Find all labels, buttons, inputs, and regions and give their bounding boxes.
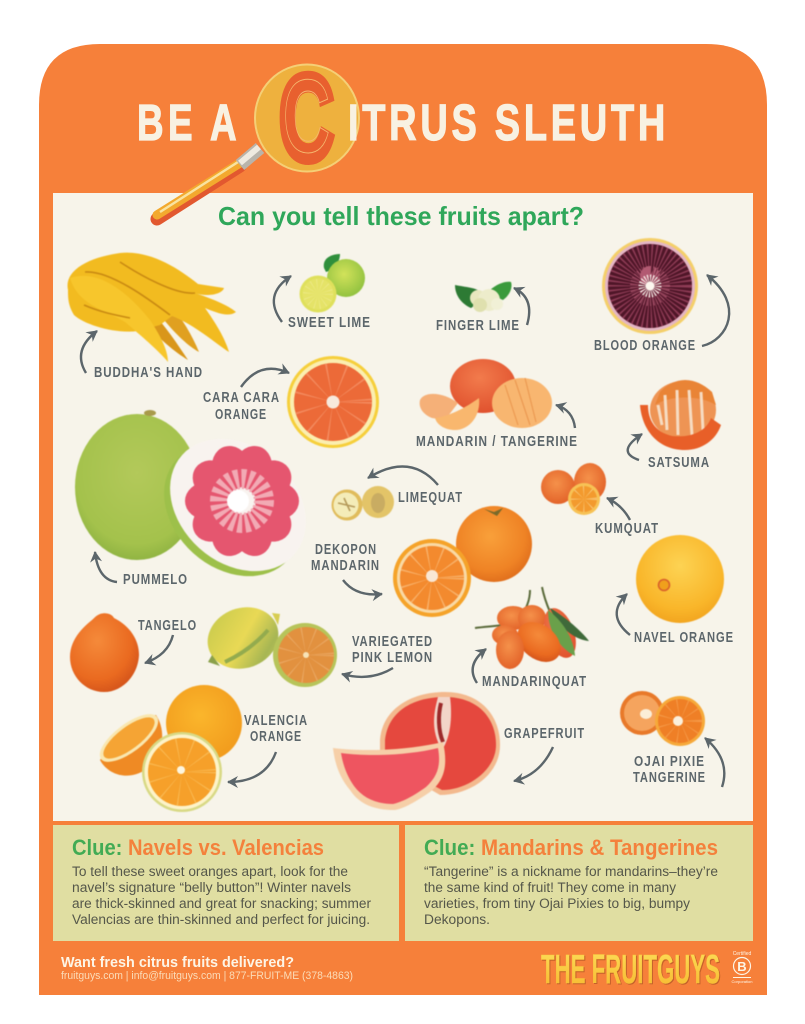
magnifier handle [157, 147, 260, 219]
panel: clue navels vs valencias [53, 825, 399, 941]
fruit: variegated pink lemon [199, 597, 337, 687]
label: kumquat: KUMQUAT [595, 521, 659, 537]
label: dekopon mandarin: MANDARIN [311, 558, 380, 574]
label: limequat: LIMEQUAT [398, 490, 463, 506]
clue body text: the same kind of fruit! They come in many [424, 880, 676, 895]
clue body text: varieties, from tiny Ojai Pixies to big, bumpy [424, 896, 690, 911]
label: mandarinquat: MANDARINQUAT [482, 674, 587, 690]
label: tangelo: TANGELO [138, 618, 197, 634]
fruit: limequat [332, 486, 394, 520]
label: variegated pink lemon [352, 634, 433, 666]
label: variegated pink lemon: PINK LEMON [352, 650, 433, 666]
clue body text [72, 864, 372, 927]
clue body text: navel’s signature “belly button”! Winter navels [72, 880, 351, 895]
footer contact text: Want fresh citrus fruits delivered? [61, 954, 294, 971]
label: mandarin / tangerine: MANDARIN / TANGERINE [416, 434, 578, 450]
fruit: finger lime [455, 282, 512, 312]
fruit: buddha's hand [68, 253, 236, 362]
fruit: pummelo [75, 410, 333, 603]
icon: certified b corporation: Corporation [732, 979, 752, 984]
clue body text [424, 864, 718, 927]
footer contact text: fruitguys.com | info@fruitguys.com | 877-FRUIT-ME (378-4863) [61, 970, 353, 982]
cut pummelo [137, 412, 333, 603]
footer contact text [61, 954, 353, 982]
panel: fruit identification area [53, 193, 753, 821]
grapefruit half [380, 692, 500, 795]
label: ojai pixie tangerine [633, 754, 706, 786]
fruit: ojai pixie tangerine [620, 691, 705, 746]
arrow: pummelo [95, 552, 117, 582]
label: buddha's hand: BUDDHA'S HAND [94, 365, 203, 381]
fruit: navel orange [636, 535, 724, 623]
label: grapefruit: GRAPEFRUIT [504, 726, 585, 742]
clue body text: “Tangerine” is a nickname for mandarins–they’re [424, 864, 718, 879]
letter C inline: C [283, 59, 330, 175]
title [137, 94, 669, 151]
fruit: blood orange [602, 238, 698, 334]
fruit: kumquat [541, 463, 606, 515]
label: navel orange: NAVEL ORANGE [634, 630, 734, 646]
fruit: dekopon mandarin [393, 506, 532, 617]
label: valencia orange [244, 713, 308, 745]
letter C: C [279, 50, 334, 186]
clue heading: Clue: Navels vs. Valencias [72, 835, 324, 860]
label: pummelo: PUMMELO [123, 572, 188, 588]
label: variegated pink lemon: VARIEGATED [352, 634, 433, 650]
leaves [550, 608, 589, 641]
fruit: sweet lime [300, 254, 365, 312]
stem [144, 410, 156, 416]
fruit: grapefruit [333, 692, 500, 810]
label: finger lime: FINGER LIME [436, 318, 520, 334]
label: blood orange: BLOOD ORANGE [594, 338, 696, 354]
arrow: buddha's hand [81, 331, 97, 373]
arrow: variegated pink lemon [342, 668, 393, 677]
icon: certified b corporation: Certified [733, 951, 752, 957]
arrow: grapefruit [514, 747, 553, 781]
clue heading: Clue: Mandarins & Tangerines [424, 835, 718, 860]
leaf [324, 254, 340, 272]
fruit: valencia orange [93, 685, 242, 812]
arrow: kumquat [607, 498, 630, 520]
fruit: mandarin / tangerine [420, 359, 552, 430]
subtitle: Can you tell these fruits apart? [218, 201, 584, 231]
label: dekopon mandarin: DEKOPON [315, 542, 377, 558]
label: sweet lime: SWEET LIME [288, 315, 371, 331]
grapefruit wedge [333, 742, 445, 810]
panel: clue mandarins and tangerines [405, 825, 753, 941]
arrow: cara cara orange [241, 369, 289, 387]
title text end: ITRUS SLEUTH [348, 94, 669, 151]
magnifier lens [255, 64, 359, 172]
arrow: tangelo [145, 635, 173, 663]
whole pummelo [75, 414, 199, 560]
fruit: satsuma [640, 380, 721, 450]
label: valencia orange: ORANGE [250, 729, 302, 745]
icon: certified b corporation [732, 951, 752, 984]
label: ojai pixie tangerine: TANGERINE [633, 770, 706, 786]
clue body text: are thick-skinned and great for snacking; summer [72, 896, 372, 911]
label: cara cara orange: CARA CARA [203, 390, 280, 406]
label: satsuma: SATSUMA [648, 455, 710, 471]
label: valencia orange: VALENCIA [244, 713, 308, 729]
stems [475, 587, 550, 628]
fruit: tangelo [70, 613, 139, 692]
clue body text: Dekopons. [424, 912, 490, 927]
arrow: ojai pixie tangerine [705, 738, 724, 787]
title text start: BE A [137, 94, 241, 151]
label: dekopon mandarin [311, 542, 380, 574]
arrow: blood orange [702, 275, 729, 346]
label: cara cara orange [203, 390, 280, 423]
arrow: sweet lime [274, 276, 291, 322]
arrow: satsuma [628, 434, 642, 460]
arrow: mandarin / tangerine [556, 405, 575, 428]
fruit: cara cara orange [287, 356, 379, 448]
clue body text: To tell these sweet oranges apart, look for the [72, 864, 348, 879]
label: ojai pixie tangerine: OJAI PIXIE [634, 754, 705, 770]
arrow: mandarinquat [473, 649, 486, 683]
arrow: limequat [368, 467, 438, 485]
fruit: mandarinquat [475, 587, 589, 670]
label: cara cara orange: ORANGE [215, 407, 267, 423]
icon: certified b corporation: B [737, 959, 747, 974]
clue body text: Valencias are thin-skinned and perfect for juicing. [72, 912, 370, 927]
arrow: dekopon mandarin [343, 580, 382, 594]
arrow: navel orange [617, 594, 630, 635]
arrow: finger lime [514, 288, 529, 325]
icon: magnifying glass with letter C [157, 50, 359, 219]
navel [658, 580, 670, 590]
arrow: valencia orange [228, 752, 276, 782]
